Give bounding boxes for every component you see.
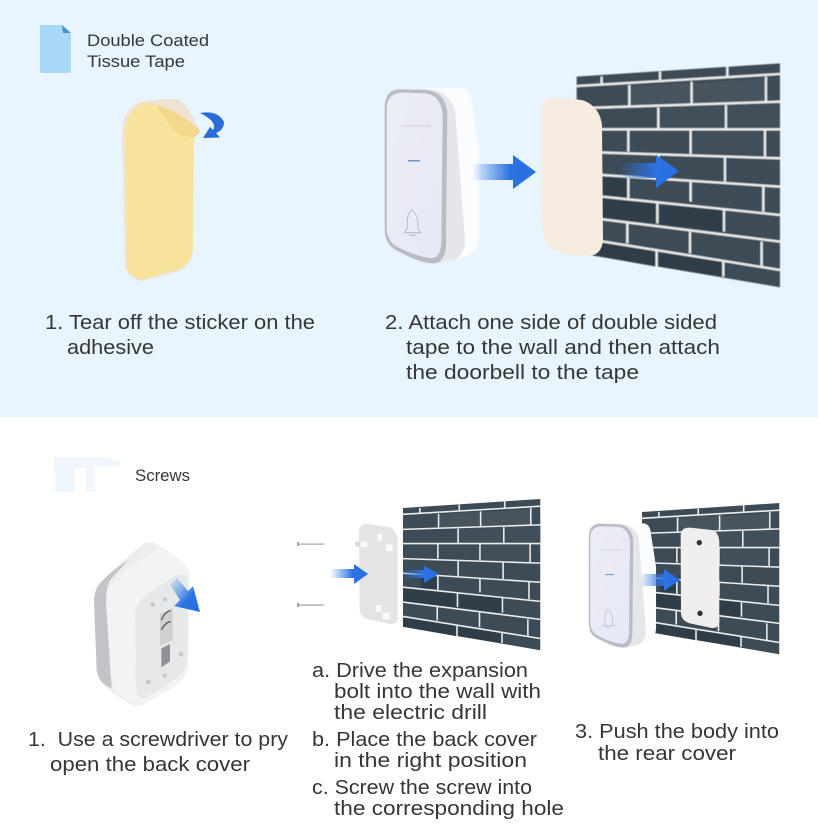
step 2 text: tape to the wall and then attach (406, 337, 720, 359)
step 2 text: 2. Attach one side of double sided (385, 312, 717, 334)
arrow: tape to wall (622, 155, 679, 188)
step 1 text (28, 729, 288, 776)
legend label: screws: Screws (135, 466, 190, 485)
step 2 text: the doorbell to the tape (406, 362, 639, 384)
step a/b/c text: c. Screw the screw into (312, 777, 532, 799)
step a/b/c text: bolt into the wall with (334, 681, 541, 703)
icon: curved blue arrow (200, 112, 224, 138)
image: rear cover on wall (681, 528, 719, 628)
arrow: cover to wall (403, 566, 439, 583)
step a/b/c text: b. Place the back cover (312, 729, 537, 751)
icon: tissue tape sheet (40, 25, 71, 73)
legend label: tape: Double Coated (87, 31, 209, 50)
image: double sided tape (541, 98, 603, 256)
step a/b/c text: in the right position (334, 750, 527, 772)
step a/b/c text (312, 660, 564, 820)
step 3 text: the rear cover (598, 743, 736, 765)
image: brick wall with back cover step (403, 499, 540, 650)
step 3 text: 3. Push the body into (575, 721, 779, 743)
step a/b/c text: the corresponding hole (334, 798, 564, 820)
image: doorbell front small (589, 523, 656, 648)
step a/b/c text: the electric drill (334, 702, 487, 724)
icon: electric drill (54, 457, 120, 492)
arrow: pry cover (170, 578, 200, 612)
panel: adhesive tape method (0, 0, 818, 417)
arrow: body to rear cover (642, 569, 680, 591)
step 1 text: 1. Use a screwdriver to pry (28, 729, 288, 751)
arrow: doorbell to tape (472, 155, 536, 189)
legend label: tape: Tissue Tape (87, 52, 185, 71)
image: brick wall with doorbell step (642, 503, 779, 654)
image: two screws (297, 542, 324, 607)
image: brick wall (577, 63, 780, 287)
image: yellow adhesive sticker being peeled (122, 99, 200, 281)
image: doorbell rear view (94, 542, 189, 706)
arrow: screws to cover (330, 564, 368, 584)
panel: screw mounting method (28, 457, 779, 820)
step 2 text (385, 312, 720, 384)
image: back cover plate (355, 524, 398, 624)
step 1 text (45, 312, 315, 359)
step a/b/c text: a. Drive the expansion (312, 660, 528, 682)
image: doorbell front (385, 87, 479, 264)
step 1 text: 1. Tear off the sticker on the (45, 312, 315, 334)
step 1 text: adhesive (67, 337, 154, 359)
legend label: tape (87, 31, 209, 71)
step 1 text: open the back cover (50, 754, 250, 776)
step 3 text (575, 721, 779, 765)
